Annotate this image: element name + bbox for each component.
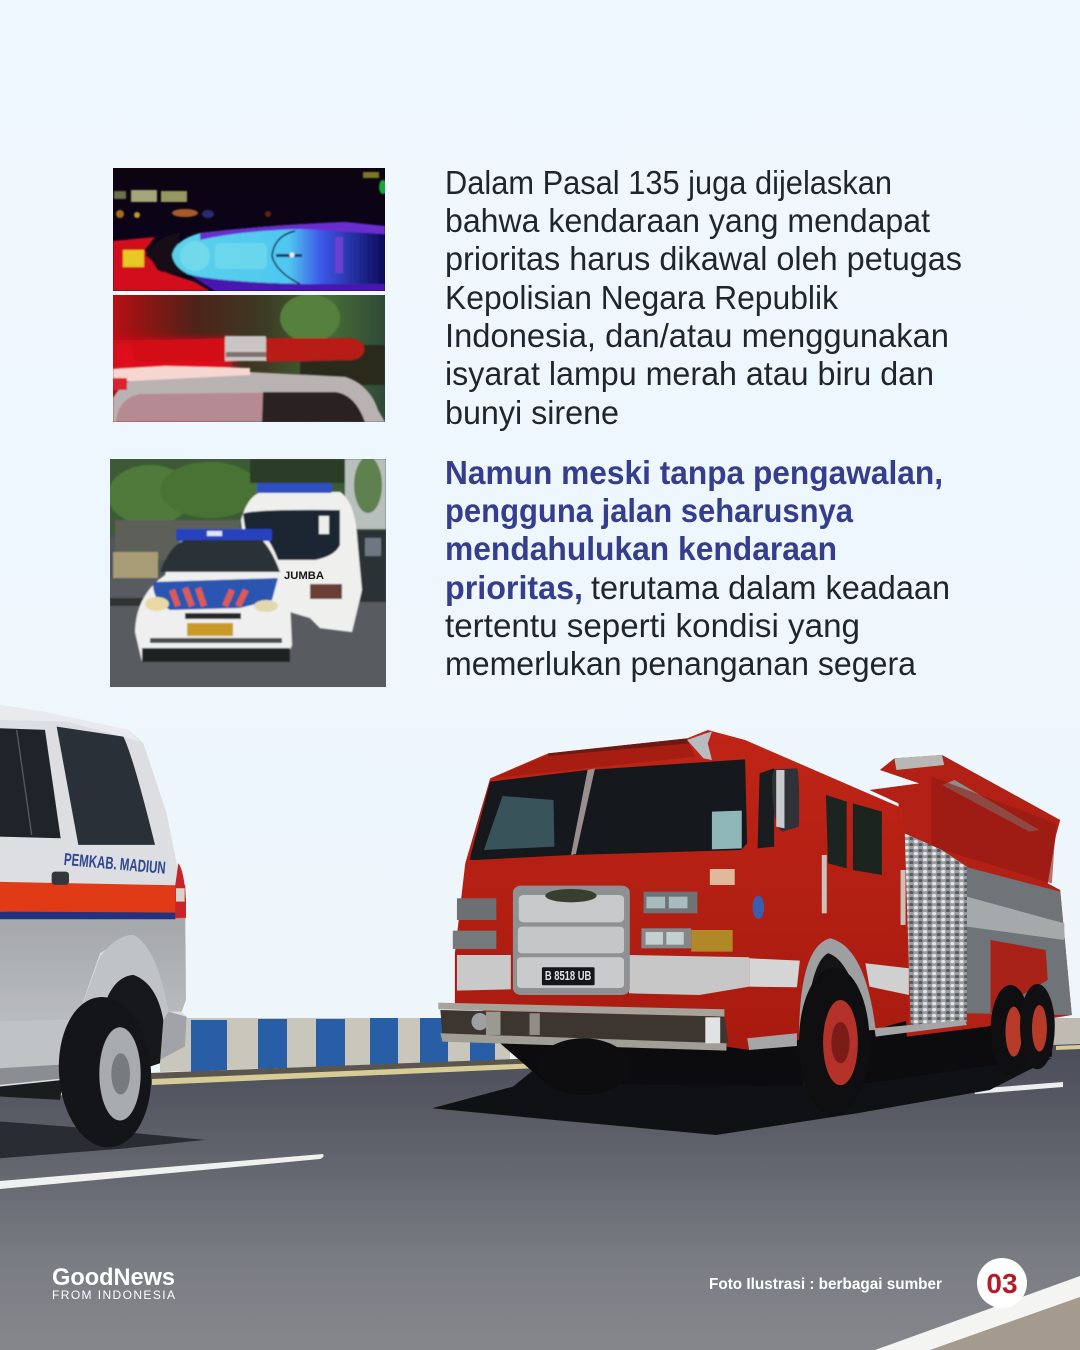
paragraph: highlighted message: prioritas, [445,569,583,606]
truck shadow [432,1058,1052,1135]
page number [977,1258,1027,1308]
rear tank body [869,755,1072,1037]
wheel arch [799,938,876,1040]
license plate: B 8518 UB [545,969,591,984]
truck underside [496,1013,1052,1087]
logo: GoodNews from Indonesia: FROM INDONESIA [52,1288,175,1302]
mirror [772,768,799,832]
van side window [0,728,61,838]
side compartments [965,867,1072,1015]
paragraph: highlighted message: terutama dalam keadaan [591,569,950,606]
cab body [455,730,909,1050]
photo: red police light on car [113,294,385,422]
photo: blue police light at night [113,168,387,291]
photo credit: Foto Ilustrasi : berbagai sumber [709,1276,942,1293]
van stripe [0,882,186,918]
van bumper [157,1012,187,1060]
paragraph: highlighted message [445,454,950,682]
van rear window [57,727,155,845]
paragraph: explanation of Pasal 135: Dalam Pasal 135 juga dijelaskan [445,164,892,201]
paragraph: highlighted message: tertentu seperti kondisi yang [445,607,860,644]
van shadow [0,1122,205,1158]
road barrier [150,1018,1080,1082]
white stripe [457,955,511,991]
logo: GoodNews from Indonesia: GoodNews [52,1264,175,1291]
van wheel arch [100,975,163,1083]
headlights [453,892,733,952]
van body [0,705,187,1097]
road [0,1044,1080,1350]
van label: PEMKAB. MADIUN [63,849,167,878]
rear ladder [942,780,1039,832]
chrome pump panel [905,833,967,1032]
paragraph: explanation of Pasal 135: Kepolisian Negara Republik [445,279,838,316]
van tail light [175,863,186,918]
van door handle [52,872,69,885]
front tire [537,1038,630,1095]
van wheel [54,994,156,1151]
paragraph: explanation of Pasal 135: prioritas harus dikawal oleh petugas [445,240,962,277]
windshield [469,759,747,860]
chrome beacon [687,732,712,760]
fire truck [432,730,1072,1135]
ambulance lettering: JUMBA [284,570,324,582]
paragraph: highlighted message: mendahulukan kendaraan [445,530,837,567]
paragraph: explanation of Pasal 135: bunyi sirene [445,394,619,431]
sticker [710,869,735,885]
van: ambulance [0,705,205,1158]
door handles [822,855,827,913]
front wheel [799,968,869,1116]
rear wheels [991,984,1055,1075]
paragraph: explanation of Pasal 135: isyarat lampu merah atau biru dan [445,355,934,392]
paragraph: explanation of Pasal 135 [445,164,962,431]
paragraph: explanation of Pasal 135: Indonesia, dan/atau menggunakan [445,317,949,354]
van lower panel [0,918,186,1022]
photo: police car and ambulance [108,457,386,687]
side door window [758,768,774,848]
paragraph: highlighted message: memerlukan penanganan segera [445,645,917,682]
paragraph: explanation of Pasal 135: bahwa kendaraan yang mendapat [445,202,930,239]
paragraph: highlighted message: pengguna jalan seharusnya [445,492,854,529]
page number: 03 [986,1268,1018,1299]
paragraph: highlighted message: Namun meski tanpa pengawalan, [445,454,943,491]
bumper [438,1003,967,1051]
emblem [753,896,764,919]
grille [513,886,630,995]
